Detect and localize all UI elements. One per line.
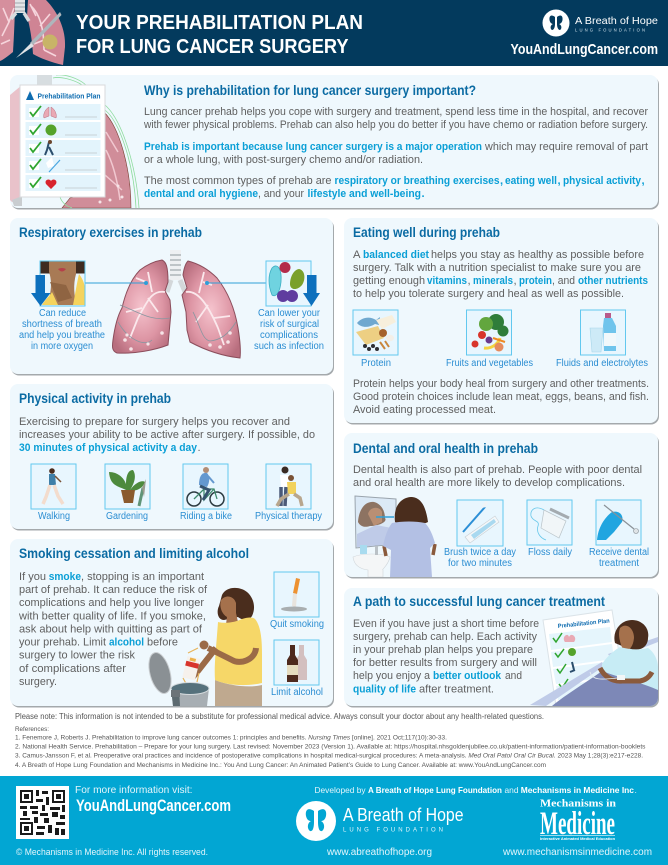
text: more information: For more information visit: — [75, 784, 192, 796]
text block: major operation: which may require removal of part — [484, 141, 649, 153]
text block: of complications after — [19, 663, 126, 675]
text block: surgery. — [19, 676, 57, 688]
icon: fluids and electrolytes — [556, 310, 648, 369]
icon: floss: Floss daily — [528, 547, 572, 558]
heading: Smoking cessation and limiting alcohol — [19, 546, 249, 561]
text block: , — [514, 275, 517, 287]
text block: minerals — [473, 275, 513, 287]
heading: Eating well during prehab — [353, 225, 500, 240]
text block: Exercising to prepare for surgery helps you recover and — [19, 416, 290, 428]
caption — [19, 308, 106, 352]
references: 3. Camus-Jansson F, et al. Preoperative oral practices and incidence of postoperative complications in hospital medical-surgical procedures: A meta-analysis. Med Oral Patol Oral Cir Bucal. 2023 May 1;28(3):e217-e228. — [15, 752, 643, 760]
text block: common types: respiratory or breathing exercises — [334, 175, 500, 187]
icon: walking: Walking — [38, 511, 70, 522]
panel: respiratory exercises — [10, 218, 334, 376]
icon: dental treatment: treatment — [599, 558, 639, 569]
websites — [326, 847, 652, 858]
logo: A Breath of Hope: A Breath of Hope — [575, 15, 658, 27]
icon: germs with arrow down — [266, 261, 320, 306]
text block: intro: Lung cancer prehab helps you cope with surgery and treatment, spend less time in the hospital, and recover — [144, 106, 648, 118]
logo: A Breath of Hope: LUNG FOUNDATION — [575, 28, 645, 32]
panel: eating well — [344, 218, 659, 424]
heading: Physical activity in prehab — [19, 391, 171, 406]
text block: and — [505, 670, 522, 682]
text block — [19, 416, 315, 454]
illustration: clipboard checklist over lung — [10, 75, 139, 208]
logo: A Breath of Hope — [542, 10, 658, 36]
footer — [0, 776, 668, 865]
text block: better outlook — [433, 670, 502, 682]
icon: dental treatment — [589, 500, 649, 569]
text block: Dental health is also part of prehab. People with poor dental — [353, 464, 642, 476]
websites: www.mechanismsinmedicine.com — [502, 847, 652, 858]
references: 2. National Health Service. Prehabilitation – Prepare for your lung surgery. Last revised: November 2023 (Version 1). Available at: https://hospital.nhsgoldenjubilee.co.uk/patient-information/patient-information-booklets — [15, 744, 646, 750]
icon: fruits and vegetables: Fruits and vegetables — [446, 358, 533, 369]
caption: Can reduce — [39, 308, 87, 319]
text block: Even if you have just a short time before — [353, 618, 539, 630]
text block: balanced diet — [363, 249, 429, 261]
references — [15, 726, 646, 769]
text block: ask about help with quitting as part of — [19, 624, 203, 636]
text block: common types: . — [422, 188, 425, 200]
logo: Mechanisms in Medicine — [540, 798, 617, 842]
text block: protein — [519, 275, 552, 287]
heading: Dental and oral health in prehab — [353, 441, 538, 456]
references: 4. A Breath of Hope Lung Foundation and Mechanisms in Medicine Inc.: You And Lung Cancer: An Animated Patient’s Guide to Lung Cancer. Available at: www.YouAndLungCancer.com — [15, 762, 546, 769]
icon: limit alcohol — [271, 640, 323, 698]
text block: help you enjoy a — [353, 670, 431, 682]
header banner — [0, 0, 668, 66]
heading: Why is prehabilitation for lung cancer surgery important? — [144, 83, 476, 98]
illustration: patient in bed with plan: Prehabilitation Plan — [558, 619, 610, 630]
text block: common types: eating well — [505, 175, 557, 187]
text block: complications and help you live longer — [19, 597, 204, 609]
icon: gardening: Gardening — [106, 511, 148, 522]
text block: for better results from surgery and will — [353, 657, 537, 669]
logo: A Breath of Hope large — [296, 801, 464, 841]
icon: physical therapy — [255, 464, 322, 522]
heading: Respiratory exercises in prehab — [19, 225, 202, 240]
references: 1. Fenemore J, Roberts J. Prehabilitation to improve lung cancer outcomes 1: principles and benefits. Nursing Times [online]. 2021 Oct;117(10):30-33. — [15, 734, 447, 742]
logo: Mechanisms in Medicine: Interactive Animated Medical Education — [540, 837, 615, 841]
title — [76, 12, 363, 58]
text block: 30 minutes of physical activity a day — [19, 442, 198, 454]
connector lines — [85, 282, 266, 284]
panel: physical activity — [10, 384, 334, 530]
developed by — [314, 785, 637, 795]
text block: If you — [19, 571, 46, 583]
caption: such as infection — [254, 341, 324, 352]
text block: major operation: or a whole lung, with post-surgery chemo and/or radiation. — [144, 154, 423, 166]
text block — [18, 571, 208, 688]
illustration: woman discarding cigarettes — [145, 588, 262, 706]
developed by: Developed by — [314, 785, 366, 795]
text block: with better quality of life. If you smoke, — [18, 610, 206, 622]
text block: and oral health are more likely to develop complications. — [353, 477, 625, 489]
text block: in your prehab plan helps you prepare — [353, 644, 533, 656]
text block: major operation — [144, 141, 649, 166]
caption: Can lower your — [258, 308, 321, 319]
icon: riding a bike — [180, 464, 233, 522]
illustration: lungs — [112, 250, 240, 358]
icon: fruits and vegetables — [446, 310, 533, 369]
text block: after treatment. — [419, 684, 494, 696]
caption — [254, 308, 324, 352]
text block: common types: , and your — [258, 188, 304, 200]
text block: . — [198, 442, 201, 454]
text block — [353, 618, 539, 696]
developed by: A Breath of Hope Lung Foundation — [368, 785, 502, 795]
caption: complications — [260, 330, 318, 341]
text block: before — [147, 636, 178, 648]
icon: fluids and electrolytes: Fluids and electrolytes — [556, 358, 648, 369]
text block: getting enough — [353, 275, 425, 287]
icon: protein: Protein — [361, 358, 391, 369]
title: FOR LUNG CANCER SURGERY — [76, 36, 349, 58]
icon: gardening — [105, 464, 150, 522]
text block: intro — [143, 106, 648, 131]
text block: major operation: Prehab is important because lung cancer surgery is a major operation — [144, 141, 482, 153]
panel: smoking and alcohol — [10, 539, 334, 708]
text: more information: YouAndLungCancer.com — [76, 797, 231, 815]
icon: riding a bike: Riding a bike — [180, 511, 233, 522]
copyright: © Mechanisms in Medicine Inc. All rights reserved. — [16, 847, 208, 858]
text block: other nutrients — [578, 275, 648, 287]
text block: , stopping is an important — [81, 571, 205, 583]
text block — [353, 249, 648, 300]
text block: to help you tolerate surgery and heal as well as possible. — [353, 288, 624, 300]
icon: quit smoking — [270, 572, 324, 630]
text block: protein: Protein helps your body heal from surgery and other treatments. — [353, 378, 649, 390]
icon: physical therapy: Physical therapy — [255, 511, 322, 522]
text block: your prehab. Limit — [19, 636, 107, 648]
text block: protein: Good protein choices include lean meat, eggs, beans, and fish. — [353, 391, 649, 403]
icon: throat with arrow down — [31, 261, 85, 306]
icon: protein — [353, 310, 398, 369]
icon: limit alcohol: Limit alcohol — [271, 687, 323, 698]
logo: A Breath of Hope large: A Breath of Hope — [343, 805, 464, 825]
caption: risk of surgical — [260, 319, 319, 330]
text block: common types: lifestyle and well-being — [308, 188, 421, 200]
text block: common types: physical activity — [563, 175, 642, 187]
icon: toothbrush and paste — [444, 500, 516, 569]
text: more information — [75, 784, 231, 815]
panel: dental and oral health — [344, 433, 659, 578]
text block: quality of life — [353, 684, 416, 696]
icon: toothbrush and paste: Brush twice a day — [444, 547, 516, 558]
text block: , and — [552, 275, 575, 287]
text block: vitamins — [427, 275, 467, 287]
text block: protein: Avoid eating processed meat. — [353, 404, 496, 416]
text block: alcohol — [109, 636, 144, 648]
icon: QR code — [16, 786, 69, 839]
caption: in more oxygen — [31, 341, 93, 352]
icon: dental treatment: Receive dental — [589, 547, 649, 558]
icon: floss — [527, 500, 572, 558]
text block: , — [468, 275, 471, 287]
heading: A path to successful lung cancer treatment — [353, 594, 605, 609]
text block: common types: The most common types of prehab are — [144, 175, 332, 187]
text block: common types: , — [500, 175, 503, 187]
illustration: patient in bed with plan — [530, 610, 658, 706]
developed by: and — [504, 785, 519, 795]
logo: A Breath of Hope large: LUNG FOUNDATION — [343, 828, 443, 834]
text block: common types: , — [642, 175, 645, 187]
logo: Mechanisms in Medicine: Medicine — [540, 806, 615, 842]
illustration: clipboard checklist over lung: Prehabilitation Plan — [38, 94, 100, 100]
icon: quit smoking: Quit smoking — [270, 619, 324, 630]
icon: walking — [31, 464, 76, 522]
panel: path to successful treatment — [344, 588, 659, 708]
text block: smoke — [49, 571, 81, 583]
websites: www.abreathofhope.org — [326, 847, 432, 858]
note: medical disclaimer: Please note: This information is not intended to be a substitute for professional medical advice. Always consult your doctor about any health-related questions. — [15, 712, 544, 721]
text block: common types: , — [558, 175, 561, 187]
text block: common types — [144, 175, 645, 200]
title: YOUR PREHABILITATION PLAN — [76, 12, 363, 34]
text block: common types: dental and oral hygiene — [144, 188, 258, 200]
icon: lungs with scalpel — [0, 0, 65, 65]
text block: surgery to lower the risk — [19, 650, 135, 662]
developed by: Mechanisms in Medicine Inc — [521, 785, 634, 795]
developed by: . — [634, 785, 637, 795]
icon: toothbrush and paste: for two minutes — [448, 558, 512, 569]
illustration: woman brushing teeth at mirror — [353, 496, 435, 577]
panel: why prehabilitation is important — [10, 75, 659, 210]
caption: and help you breathe — [19, 330, 106, 341]
text block: part of prehab. It can reduce the risk of — [19, 584, 208, 596]
text block: surgery, prehab can help. Each activity — [353, 631, 537, 643]
text block: increases your ability to be active after surgery. If possible, do — [19, 429, 315, 441]
caption: shortness of breath — [22, 319, 102, 330]
text block: protein — [353, 378, 649, 416]
text block: surgery. Talk with a nutrition specialist to make sure you are — [353, 262, 641, 274]
text block — [353, 464, 642, 489]
text block: helps you stay as healthy as possible before — [431, 249, 644, 261]
references: References: — [15, 726, 49, 733]
text block: A — [353, 249, 361, 261]
logo: Mechanisms in Medicine: Mechanisms in — [540, 798, 617, 810]
